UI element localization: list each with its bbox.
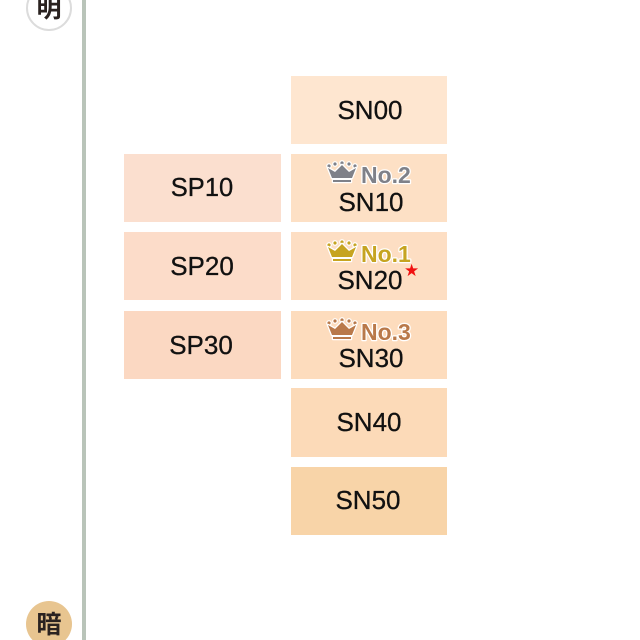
rank badge: No.1 [326,239,412,267]
swatch: SP10: SP10 [171,174,233,202]
rank badge: No.3: No.3 [361,319,411,345]
swatch: SN50: SN50 [335,485,401,515]
swatch: SN50 [291,467,447,535]
swatch: SP10 [124,154,281,222]
swatch: SN40: SN40 [336,407,402,437]
rank badge: No.3 [326,317,412,345]
swatch: SN10: SN10 [338,187,404,217]
label: dark: 暗 [36,611,62,639]
swatch: SN40 [291,388,447,457]
label: dark [26,601,72,640]
swatch: SN30: SN30 [338,343,404,373]
rank badge: No.2 [326,160,412,188]
swatch: SP30 [124,311,281,379]
swatch: SP20: SP20 [170,251,234,281]
swatch: SN10 [291,154,447,222]
red star: ★ [404,261,419,281]
rank badge: No.2: No.2 [361,162,411,188]
swatch: SN30 [291,311,447,379]
label: bright [26,0,72,31]
swatch: SN20 [291,232,447,300]
swatch: SP20 [124,232,281,300]
vertical scale bar [82,0,86,640]
swatch: SN20: SN20 [337,265,403,295]
swatch: SP30: SP30 [169,330,233,360]
rank badge: No.1: No.1 [361,241,411,267]
swatch: SN00: SN00 [337,95,403,125]
swatch: SN00 [291,76,447,144]
